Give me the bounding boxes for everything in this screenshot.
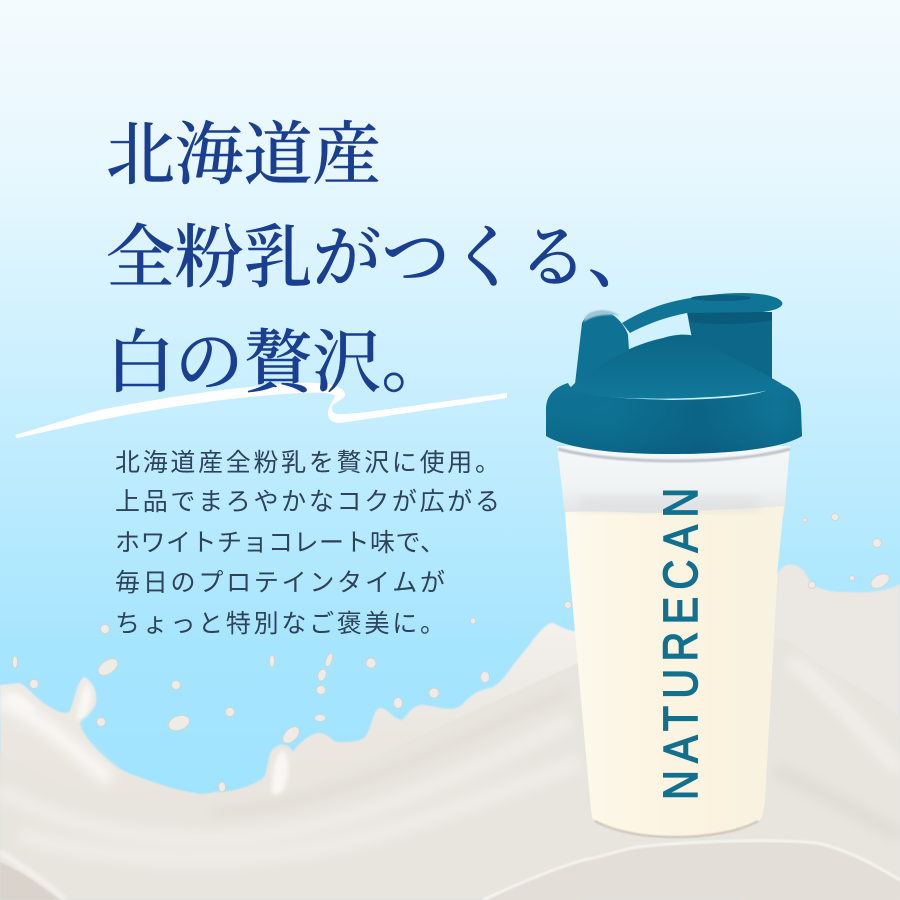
milk second layer right — [740, 638, 900, 900]
lid rim shading — [546, 383, 802, 454]
shaker flip tab — [575, 312, 629, 384]
title: 白の贅沢。 — [106, 325, 450, 401]
milk main fold — [0, 662, 900, 900]
front milk surface — [483, 841, 900, 900]
shaker cup body — [557, 446, 790, 515]
shaker bottle — [546, 293, 802, 837]
milk splash highlights — [5, 684, 288, 795]
liquid top shadow — [580, 498, 760, 510]
flip tab highlight — [584, 310, 620, 322]
NATURECAN logo: NATURECAN — [654, 488, 708, 800]
shaker spout and loop — [622, 293, 782, 382]
body text: 北海道産全粉乳を贅沢に使用。 — [115, 449, 500, 477]
title: 全粉乳がつくる、 — [106, 220, 656, 296]
title — [106, 117, 656, 401]
shaker lid dome — [570, 335, 782, 399]
brush stroke underline — [15, 383, 507, 438]
milk crown left — [0, 623, 580, 900]
body text: 毎日のプロテインタイムが — [115, 569, 445, 597]
shaker liquid — [565, 506, 784, 837]
title: 北海道産 — [106, 117, 381, 193]
bottom dark corner left — [0, 862, 62, 900]
cup neck shadow line — [558, 449, 790, 461]
milk wave behind shaker — [740, 565, 900, 900]
front surface highlight edge — [483, 841, 900, 900]
white edge of left corner — [0, 852, 65, 900]
shaker lid rim — [546, 383, 802, 454]
body text — [115, 449, 500, 638]
body text: ホワイトチョコレート味で、 — [115, 529, 445, 557]
milk splash — [0, 565, 900, 900]
body text: 上品でまろやかなコクが広がる — [115, 488, 500, 516]
cup base shadow — [595, 821, 758, 837]
body text: ちょっと特別なご褒美に。 — [115, 610, 445, 638]
milk soft streaks — [0, 660, 900, 859]
milk droplets — [12, 514, 892, 792]
